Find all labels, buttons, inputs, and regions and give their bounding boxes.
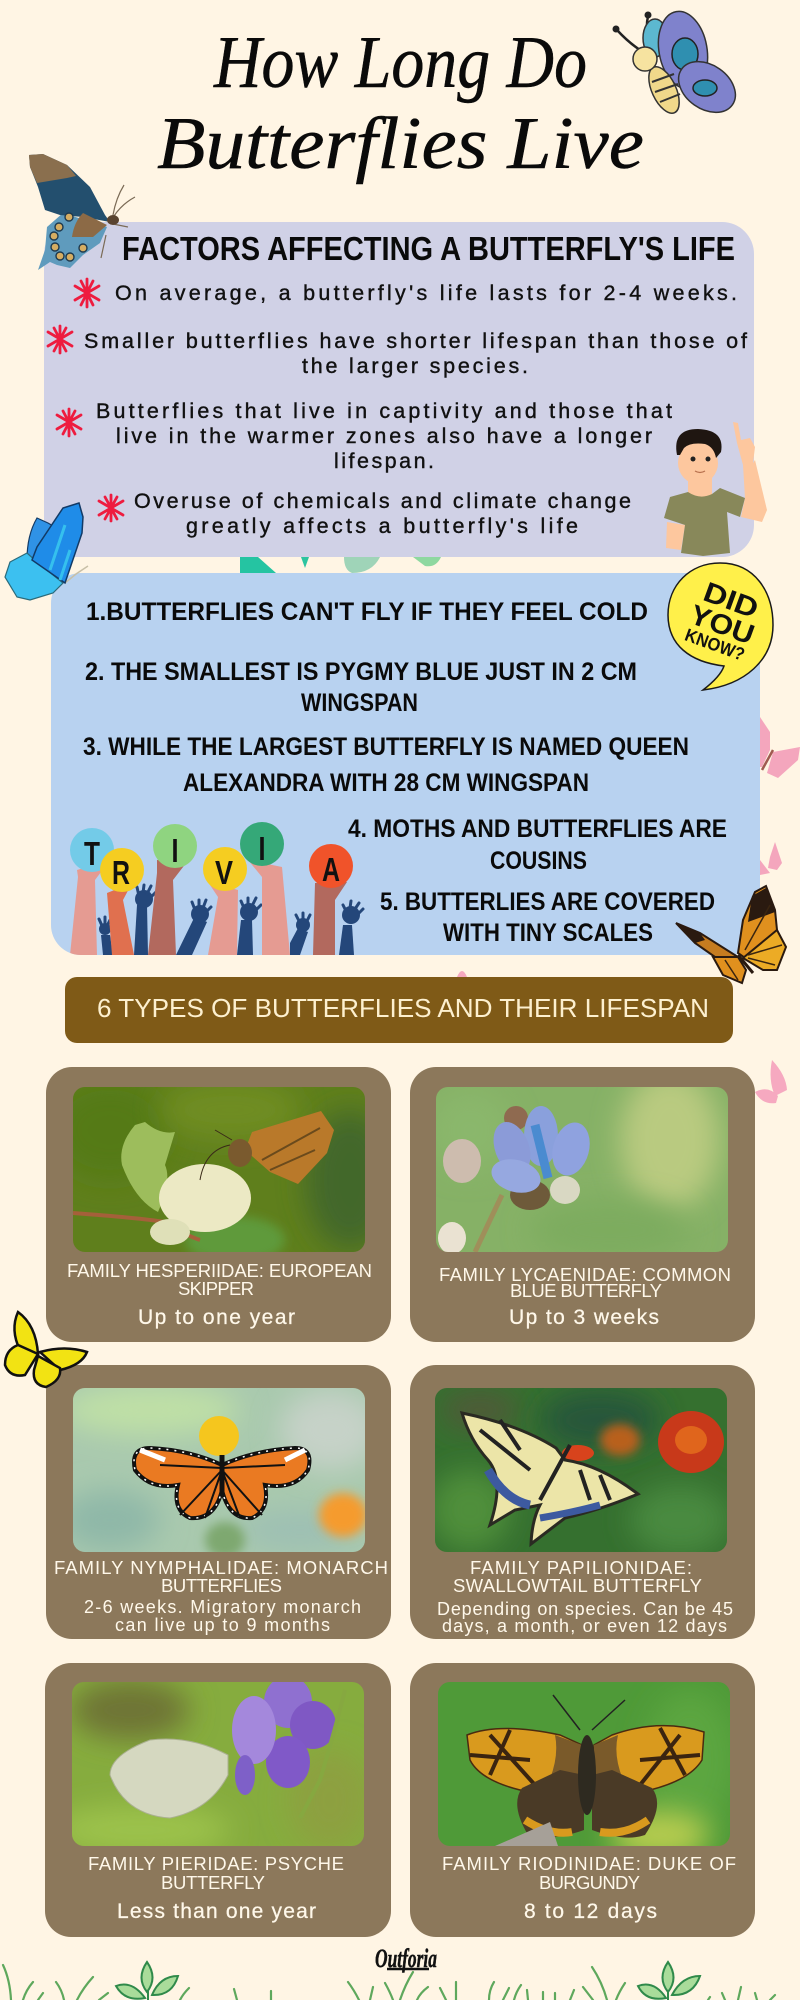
text: factor four: greatly affects a butterfly's life [186, 514, 578, 538]
text: trivia three: ALEXANDRA WITH 28 CM WINGSPAN [183, 769, 589, 797]
label: pieridae [88, 1853, 344, 1893]
icon: monarch butterfly [676, 886, 786, 983]
text: factor two: the larger species. [302, 354, 528, 378]
illustration: trivia hands: I [172, 832, 178, 869]
label: papilionidae [453, 1557, 702, 1596]
text: factor one: On average, a butterfly's life lasts for 2-4 weeks. [115, 281, 737, 305]
label: lycaenidae: FAMILY LYCAENIDAE: COMMON [439, 1264, 731, 1285]
photo: duke of burgundy butterfly [438, 1682, 735, 1860]
text: factor three: Butterflies that live in captivity and those that [96, 399, 672, 423]
title [157, 22, 644, 185]
callout: did you know bubble: KNOW? [682, 625, 747, 665]
label: hesperiidae: FAMILY HESPERIIDAE: EUROPEAN [67, 1260, 372, 1281]
text: trivia four: 4. MOTHS AND BUTTERFLIES ARE [348, 815, 727, 843]
label: papilionidae: FAMILY PAPILIONIDAE: [470, 1557, 692, 1578]
card: monarch [46, 1365, 391, 1639]
lifespan: less than a year: Less than one year [117, 1900, 316, 1923]
illustration: trivia hands: V [215, 854, 233, 891]
text: trivia three [83, 733, 689, 797]
callout: did you know bubble [668, 563, 773, 690]
logo: outforia [375, 1944, 437, 1973]
lifespan: days: 8 to 12 days [524, 1900, 657, 1923]
label: nymphalidae: BUTTERFLIES [161, 1575, 282, 1596]
text: trivia three: 3. WHILE THE LARGEST BUTTERFLY IS NAMED QUEEN [83, 733, 689, 761]
icon: cartoon purple butterfly [612, 7, 745, 123]
heading: factors: FACTORS AFFECTING A BUTTERFLY'S LIFE [122, 230, 735, 267]
text: factor two [84, 329, 747, 378]
illustration: trivia hands: I [258, 830, 266, 867]
title: Butterflies Live [157, 103, 644, 185]
label: riodinidae: BURGUNDY [539, 1872, 640, 1893]
card: duke of burgundy [410, 1663, 755, 1937]
label: hesperiidae: SKIPPER [178, 1278, 254, 1299]
label: lycaenidae: BLUE BUTTERFLY [510, 1280, 662, 1301]
callout: did you know bubble: DID [699, 576, 763, 624]
banner: section heading [65, 977, 733, 1043]
icon: dark swallowtail butterfly [29, 154, 135, 270]
text: factor three: live in the warmer zones also have a longer [116, 424, 652, 448]
photo: common blue butterfly [436, 1087, 728, 1252]
icon: yellow butterfly [5, 1312, 87, 1387]
text: trivia one: 1.BUTTERFLIES CAN'T FLY IF THEY FEEL COLD [86, 598, 648, 626]
text: factor two: Smaller butterflies have shorter lifespan than those of [84, 329, 747, 353]
panel: factors [44, 222, 754, 557]
text: trivia five [380, 888, 715, 947]
lifespan: monarch: can live up to 9 months [115, 1615, 330, 1635]
icon: pink butterfly large [760, 717, 800, 778]
lifespan: swallowtail: days, a month, or even 12 days [442, 1616, 727, 1636]
text: trivia five: 5. BUTTERLIES ARE COVERED [380, 888, 715, 916]
icon: leaf plant right [638, 1962, 700, 2000]
illustration: trivia hands: R [112, 854, 130, 891]
photo: swallowtail butterfly [430, 1388, 730, 1555]
title: How Long Do [213, 22, 587, 104]
label: lycaenidae [439, 1264, 731, 1301]
lifespan: monarch [84, 1597, 361, 1635]
text: factor four [134, 489, 631, 538]
illustration: trivia hands [70, 822, 363, 955]
label: pieridae: FAMILY PIERIDAE: PSYCHE [88, 1853, 344, 1874]
label: hesperiidae [67, 1260, 372, 1299]
icon: red asterisks [48, 279, 123, 521]
illustration: trivia hands: A [322, 851, 340, 888]
text: factor three [96, 399, 672, 473]
label: riodinidae: FAMILY RIODINIDAE: DUKE OF [442, 1853, 736, 1874]
illustration: boy pointing up [664, 422, 767, 556]
illustration: trivia hands: T [84, 835, 100, 872]
decorative: grass [3, 1965, 775, 2000]
text: trivia five: WITH TINY SCALES [443, 919, 653, 947]
card: psyche [45, 1663, 391, 1937]
lifespan: swallowtail [437, 1599, 733, 1636]
decorative: clipped green shapes between panels [240, 557, 441, 573]
label: pieridae: BUTTERFLY [161, 1872, 265, 1893]
icon: pink butterfly near card [755, 1060, 787, 1103]
lifespan: three weeks: Up to 3 weeks [509, 1306, 659, 1329]
card: swallowtail [410, 1365, 755, 1639]
icon: pink butterfly small [760, 842, 782, 875]
text: trivia two: 2. THE SMALLEST IS PYGMY BLUE JUST IN 2 CM [85, 658, 637, 686]
card: european skipper [46, 1067, 395, 1342]
lifespan: monarch: 2-6 weeks. Migratory monarch [84, 1597, 361, 1617]
callout: did you know bubble: YOU [686, 599, 758, 650]
decorative: tiny pink wing tip [457, 971, 467, 977]
lifespan: one year: Up to one year [138, 1306, 295, 1329]
card: common blue [410, 1067, 755, 1342]
photo: psyche butterfly [72, 1682, 364, 1846]
banner: section heading: 6 TYPES OF BUTTERFLIES AND THEIR LIFESPAN [97, 993, 709, 1023]
label: papilionidae: SWALLOWTAIL BUTTERFLY [453, 1575, 702, 1596]
label: riodinidae [442, 1853, 736, 1893]
lifespan: swallowtail: Depending on species. Can be 45 [437, 1599, 733, 1619]
text: trivia two: WINGSPAN [301, 689, 418, 717]
icon: blue morpho butterfly [5, 503, 88, 600]
text: trivia four: COUSINS [490, 847, 587, 875]
icon: leaf plant left [116, 1962, 178, 2000]
text: trivia two [85, 658, 637, 717]
text: trivia four [348, 815, 727, 875]
label: nymphalidae: FAMILY NYMPHALIDAE: MONARCH [54, 1557, 388, 1578]
photo: skipper on white flower [73, 1087, 365, 1252]
logo: outforia: Outforia [375, 1944, 437, 1973]
label: nymphalidae [54, 1557, 388, 1596]
text: factor three: lifespan. [334, 449, 434, 473]
photo: monarch butterfly [73, 1388, 365, 1552]
panel: trivia [51, 573, 760, 955]
text: factor four: Overuse of chemicals and climate change [134, 489, 631, 513]
